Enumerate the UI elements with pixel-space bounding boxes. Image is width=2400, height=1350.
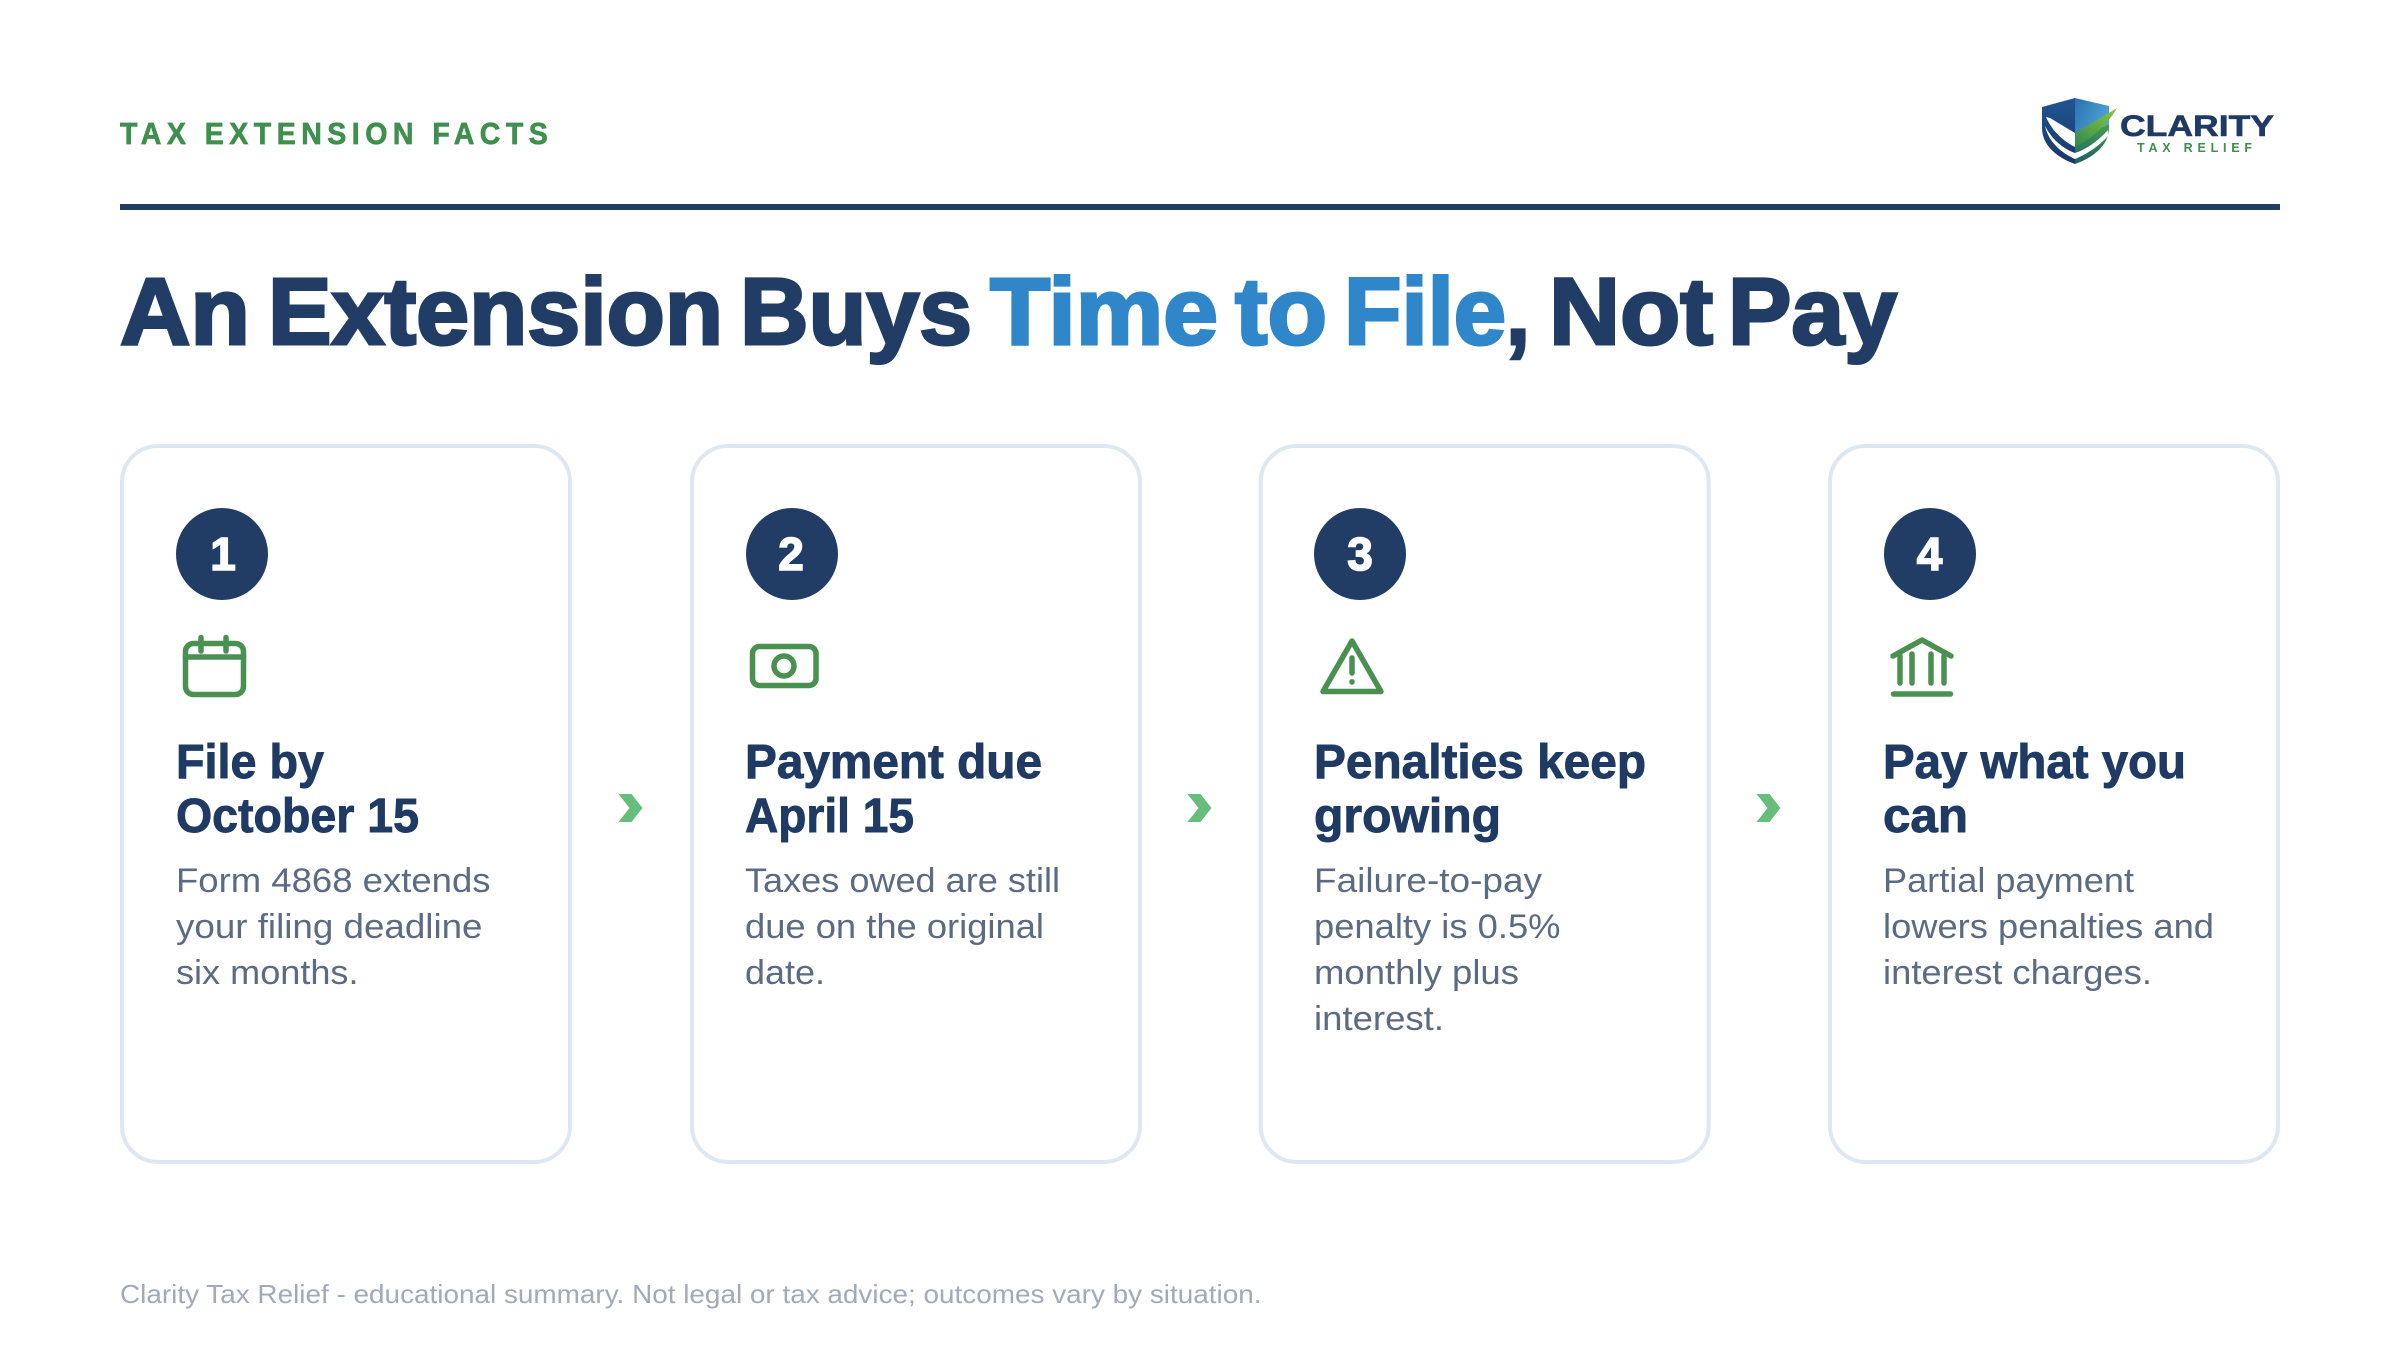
arrow 1 to 2 — [618, 794, 642, 822]
heading: Penalties keep growing: Penalties keep — [1314, 736, 1646, 789]
body text: interest. — [1314, 1000, 1444, 1038]
title: An — [120, 259, 250, 365]
body text: Partial payment — [1883, 862, 2135, 900]
eyebrow label: TAX EXTENSION FACTS — [120, 117, 548, 151]
step number 3 — [1314, 508, 1406, 600]
arrow 3 to 4 — [1756, 794, 1780, 822]
heading: Pay what you can — [1883, 736, 2186, 843]
icon: warning triangle — [1323, 641, 1381, 692]
heading: Pay what you can: can — [1883, 790, 1968, 843]
panel: step 2 — [692, 446, 1140, 1162]
heading: File by October 15: October 15 — [176, 790, 419, 843]
body text — [1314, 862, 1560, 1038]
body text: penalty is 0.5% — [1314, 908, 1560, 946]
icon: calendar — [186, 638, 244, 694]
header rule — [120, 204, 2280, 210]
heading: File by October 15 — [176, 736, 419, 843]
panel: step 4 — [1830, 446, 2278, 1162]
heading: Payment due April 15: Payment due — [745, 736, 1042, 789]
heading: Penalties keep growing — [1314, 736, 1646, 843]
arrow 2 to 3 — [1188, 794, 1212, 822]
logo wordmark: CLARITY — [2120, 110, 2274, 143]
heading: Payment due April 15 — [745, 736, 1042, 843]
title: Not — [1549, 259, 1713, 365]
title: to — [1235, 259, 1327, 365]
card outline — [1261, 446, 1709, 1162]
title: Buys — [740, 259, 972, 365]
title: , — [1506, 259, 1530, 365]
icon: bank building — [1893, 640, 1951, 694]
title: Pay — [1728, 259, 1897, 365]
panel: step 3 — [1261, 446, 1709, 1162]
heading: Pay what you can: Pay what you — [1883, 736, 2186, 789]
heading: File by October 15: File by — [176, 736, 324, 789]
title: Time — [990, 259, 1218, 365]
title: Extension — [268, 259, 723, 365]
heading: Penalties keep growing: growing — [1314, 790, 1501, 843]
logo tagline: TAX RELIEF — [2137, 141, 2252, 155]
body text: Form 4868 extends — [176, 862, 490, 900]
body text: monthly plus — [1314, 954, 1519, 992]
card outline — [692, 446, 1140, 1162]
logo: Clarity Tax Relief — [2042, 98, 2274, 164]
card outline — [1830, 446, 2278, 1162]
step number 4: 4 — [1917, 528, 1943, 580]
body text: your filing deadline — [176, 908, 482, 946]
body text — [1883, 862, 2214, 992]
body text — [176, 862, 490, 992]
step number 2 — [746, 508, 838, 600]
body text: six months. — [176, 954, 358, 992]
step number 3: 3 — [1347, 528, 1373, 580]
body text: date. — [745, 954, 825, 992]
body text: due on the original — [745, 908, 1044, 946]
body text: Failure-to-pay — [1314, 862, 1542, 900]
body text: lowers penalties and — [1883, 908, 2214, 946]
icon: banknote — [752, 646, 816, 686]
footer disclaimer: Clarity Tax Relief - educational summary. Not legal or tax advice; outcomes vary by situation. — [120, 1279, 1262, 1309]
card outline — [122, 446, 570, 1162]
step number 1 — [176, 508, 268, 600]
heading: Payment due April 15: April 15 — [745, 790, 914, 843]
step number 2: 2 — [778, 528, 804, 580]
icon: shield with check — [2042, 98, 2117, 164]
step number 1: 1 — [210, 528, 236, 580]
step number 4 — [1884, 508, 1976, 600]
body text: Taxes owed are still — [745, 862, 1060, 900]
panel: step 1 — [122, 446, 570, 1162]
title: File — [1344, 259, 1506, 365]
body text: interest charges. — [1883, 954, 2152, 992]
body text — [745, 862, 1060, 992]
